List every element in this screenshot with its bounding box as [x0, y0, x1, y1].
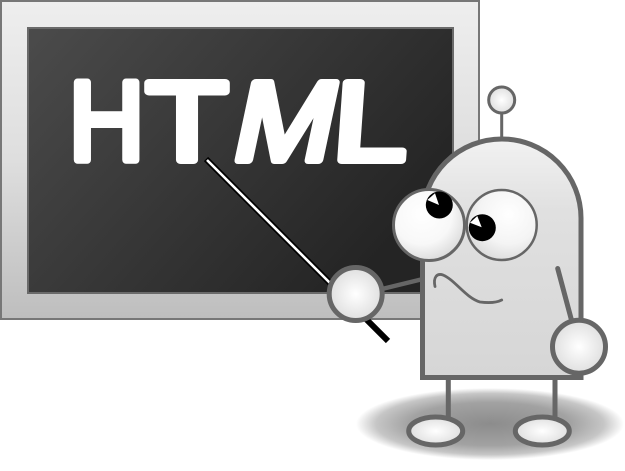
left hand — [329, 268, 382, 320]
right foot — [515, 417, 569, 445]
chalk heading: HTML: M — [224, 59, 350, 184]
mouth — [434, 274, 502, 303]
legs — [448, 378, 555, 420]
antenna — [489, 87, 515, 139]
shadow under robot — [356, 388, 624, 460]
right eye — [467, 190, 537, 260]
body — [422, 139, 581, 378]
chalk heading: HTML: H — [69, 59, 144, 184]
left foot — [409, 417, 463, 445]
chalkboard — [1, 1, 479, 319]
pointer stick — [206, 159, 388, 341]
chalk heading: HTML — [69, 59, 413, 184]
left arm — [382, 279, 423, 289]
right hand — [552, 320, 606, 373]
chalk heading: HTML: L — [329, 60, 413, 184]
chalk heading: HTML: T — [146, 60, 228, 184]
right arm — [558, 268, 572, 322]
robot character — [329, 87, 606, 445]
left eye — [394, 190, 464, 260]
